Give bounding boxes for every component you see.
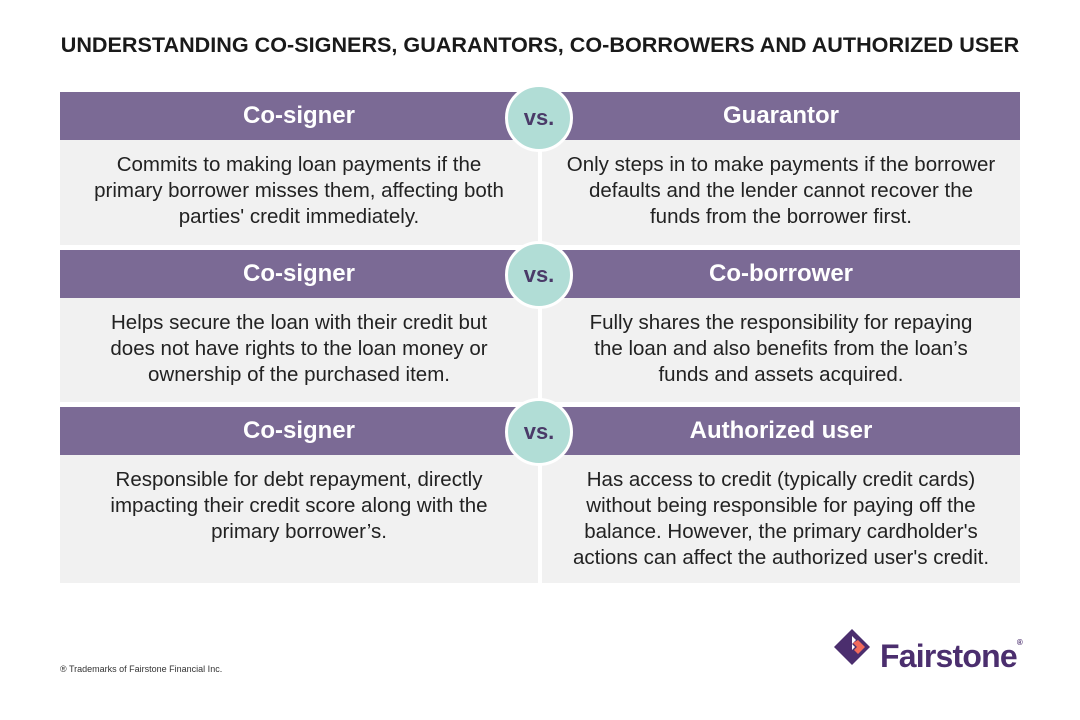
text: authorized user [542, 455, 1020, 583]
title: UNDERSTANDING CO-SIGNERS, GUARANTORS, CO-BORROWERS AND AUTHORIZED USER [61, 32, 1019, 57]
icon: diamond [834, 629, 870, 665]
heading: co-signer: Co-signer [243, 417, 355, 444]
logo text: Fairstone® [880, 638, 1022, 674]
vs badge [505, 241, 573, 309]
text: co-signer: ownership of the purchased item. [148, 363, 450, 386]
text: co-signer [60, 298, 538, 402]
text: guarantor: Only steps in to make payments if the borrower [567, 153, 995, 176]
text: co-signer [60, 140, 538, 245]
text: co-signer [60, 455, 538, 583]
heading: guarantor [542, 92, 1020, 140]
text: authorized user: balance. However, the primary cardholder's [584, 520, 978, 543]
text: guarantor: funds from the borrower first. [650, 205, 912, 228]
text: co-signer: primary borrower’s. [211, 520, 387, 543]
vs badge: vs. [524, 105, 554, 130]
panel: co-signer vs co-borrower [60, 241, 1020, 402]
vs badge: vs. [524, 262, 554, 287]
heading: guarantor: Guarantor [723, 102, 839, 129]
footnote: ® Trademarks of Fairstone Financial Inc. [60, 664, 222, 674]
text: authorized user: actions can affect the authorized user's credit. [573, 546, 989, 569]
vs badge [505, 84, 573, 152]
text: co-signer: Responsible for debt repayment, directly [116, 468, 482, 491]
heading: co-signer [60, 92, 538, 140]
text: co-signer: Commits to making loan payments if the [117, 153, 481, 176]
text: co-borrower: Fully shares the responsibility for repaying [590, 311, 972, 334]
heading: co-signer [60, 407, 538, 455]
heading: co-borrower [542, 250, 1020, 298]
vs badge [505, 398, 573, 466]
text: co-signer: does not have rights to the loan money or [110, 337, 488, 360]
text: co-signer: impacting their credit score along with the [110, 494, 488, 517]
logo: Fairstone [834, 629, 1023, 674]
heading: co-signer: Co-signer [243, 102, 355, 129]
panel: co-signer vs guarantor [60, 87, 1020, 245]
text: guarantor [542, 140, 1020, 245]
text: co-borrower [542, 298, 1020, 402]
text: co-borrower: funds and assets acquired. [658, 363, 904, 386]
text: co-signer: parties' credit immediately. [179, 205, 419, 228]
heading: co-signer [60, 250, 538, 298]
vs badge: vs. [524, 419, 554, 444]
panel: co-signer vs authorized user [60, 398, 1020, 583]
text: guarantor: defaults and the lender cannot recover the [589, 179, 973, 202]
text: authorized user: without being responsible for paying off the [586, 494, 976, 517]
heading: authorized user: Authorized user [690, 417, 872, 444]
text: co-signer: primary borrower misses them, affecting both [94, 179, 504, 202]
heading: authorized user [542, 407, 1020, 455]
heading: co-borrower: Co-borrower [709, 260, 853, 287]
text: authorized user: Has access to credit (typically credit cards) [587, 468, 975, 491]
text: co-borrower: the loan and also benefits from the loan’s [594, 337, 968, 360]
heading: co-signer: Co-signer [243, 260, 355, 287]
text: co-signer: Helps secure the loan with their credit but [111, 311, 487, 334]
